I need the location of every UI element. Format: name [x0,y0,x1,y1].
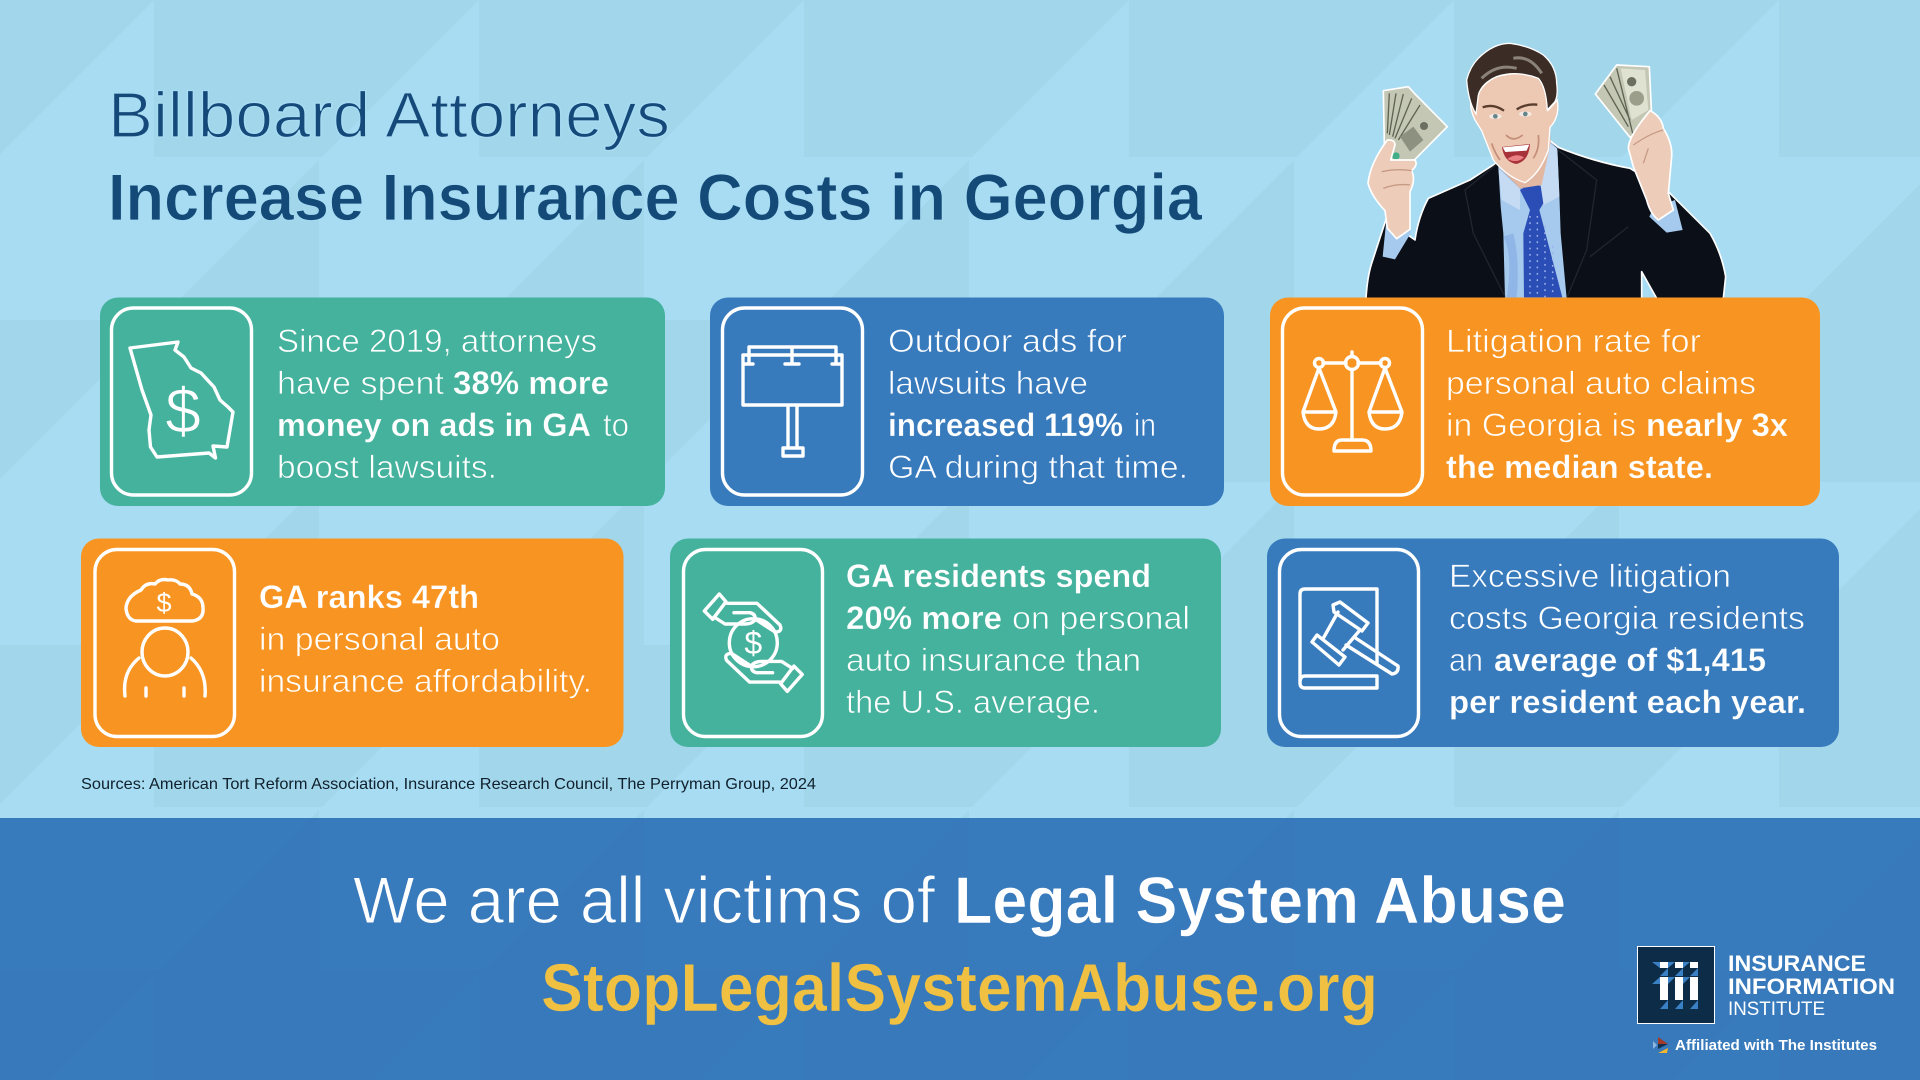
text block: money on ads in GA [277,407,591,443]
text block: in Georgia is [1446,407,1636,443]
text block: GA during that time. [888,449,1188,485]
icon: hands around dollar coin [684,550,822,736]
affiliation line: Affiliated with The Institutes [1675,1038,1877,1054]
text block [259,579,592,699]
text block [277,323,629,485]
shirt [1498,142,1567,298]
text block: the U.S. average. [846,684,1100,720]
footer band [0,818,1920,1080]
panel: litigation rate [1270,298,1820,506]
eyes [1489,114,1502,119]
text block: lawsuits have [888,365,1088,401]
hair [1467,43,1557,114]
tie [1520,184,1562,297]
left hand [1368,140,1416,239]
text block: in personal auto [259,621,500,657]
logo: Insurance Information Institute [1638,946,1895,1024]
text block: nearly 3x [1646,407,1788,443]
neck [1493,130,1551,188]
icon: Georgia state with dollar sign [112,308,252,495]
logo: Insurance Information Institute: INSTITUTE [1728,999,1825,1020]
footer URL: StopLegalSystemAbuse.org [541,950,1378,1026]
icon: billboard [722,308,862,495]
text block: insurance affordability. [259,663,592,699]
panel: ad spending [100,298,665,506]
left cuff [1383,220,1411,259]
text block: per resident each year. [1449,684,1806,720]
jacket [1366,141,1726,298]
icon: hands around dollar coin: $ [744,625,762,661]
right money fan [1595,65,1652,137]
text block: GA residents spend [846,558,1151,594]
text block: the median state. [1446,449,1713,485]
footer headline: We are all victims of [353,863,936,937]
nose [1492,135,1539,160]
text block: personal auto claims [1446,365,1756,401]
text block: on personal [1012,600,1190,636]
text block: costs Georgia residents [1449,600,1805,636]
text block: GA ranks 47th [259,579,479,615]
title [108,79,1203,234]
text block [1449,558,1806,720]
title: Billboard Attorneys [108,79,670,151]
panel: residents spend more [670,538,1221,747]
text block [1446,323,1788,485]
mouth [1502,144,1530,164]
text block: average of $1,415 [1494,642,1766,678]
panel: affordability rank [81,538,624,747]
text block [846,558,1190,720]
text block [888,323,1188,485]
panel: cost per resident [1267,538,1839,747]
icon: Georgia state with dollar sign: $ [165,375,201,447]
text block: auto insurance than [846,642,1141,678]
text block: Excessive litigation [1449,558,1731,594]
text block: in [1134,407,1156,443]
logo: Insurance Information Institute: INFORMATION [1728,974,1895,999]
sources: Sources: American Tort Reform Association, Insurance Research Council, The Perryman Group, 2024 [81,776,816,793]
right cuff [1649,200,1683,233]
photo: excited attorney holding cash [1366,43,1726,298]
panel: outdoor ads [710,298,1224,506]
icon: person with money worry cloud [95,550,234,736]
logo: Insurance Information Institute: INSURANCE [1728,951,1866,976]
right hand [1628,111,1673,220]
title: Increase Insurance Costs in Georgia [108,160,1203,234]
footer headline: Legal System Abuse [954,863,1566,937]
text block: Litigation rate for [1446,323,1701,359]
face [1471,74,1558,183]
text block: increased 119% [888,407,1123,443]
text block: Since 2019, attorneys [277,323,597,359]
footer headline [353,863,1566,937]
left money fan [1383,87,1447,171]
text block: an [1449,642,1483,678]
icon: scales of justice [1282,308,1422,495]
text block: to [603,407,629,443]
text block: boost lawsuits. [277,449,497,485]
text block: have spent [277,365,444,401]
icon: gavel on law book [1280,550,1418,736]
text block: 38% more [453,365,609,401]
collar shadow [1498,143,1559,210]
text block: Outdoor ads for [888,323,1127,359]
lapels [1465,149,1628,297]
text block: 20% more [846,600,1002,636]
icon: person with money worry cloud: $ [156,588,172,618]
